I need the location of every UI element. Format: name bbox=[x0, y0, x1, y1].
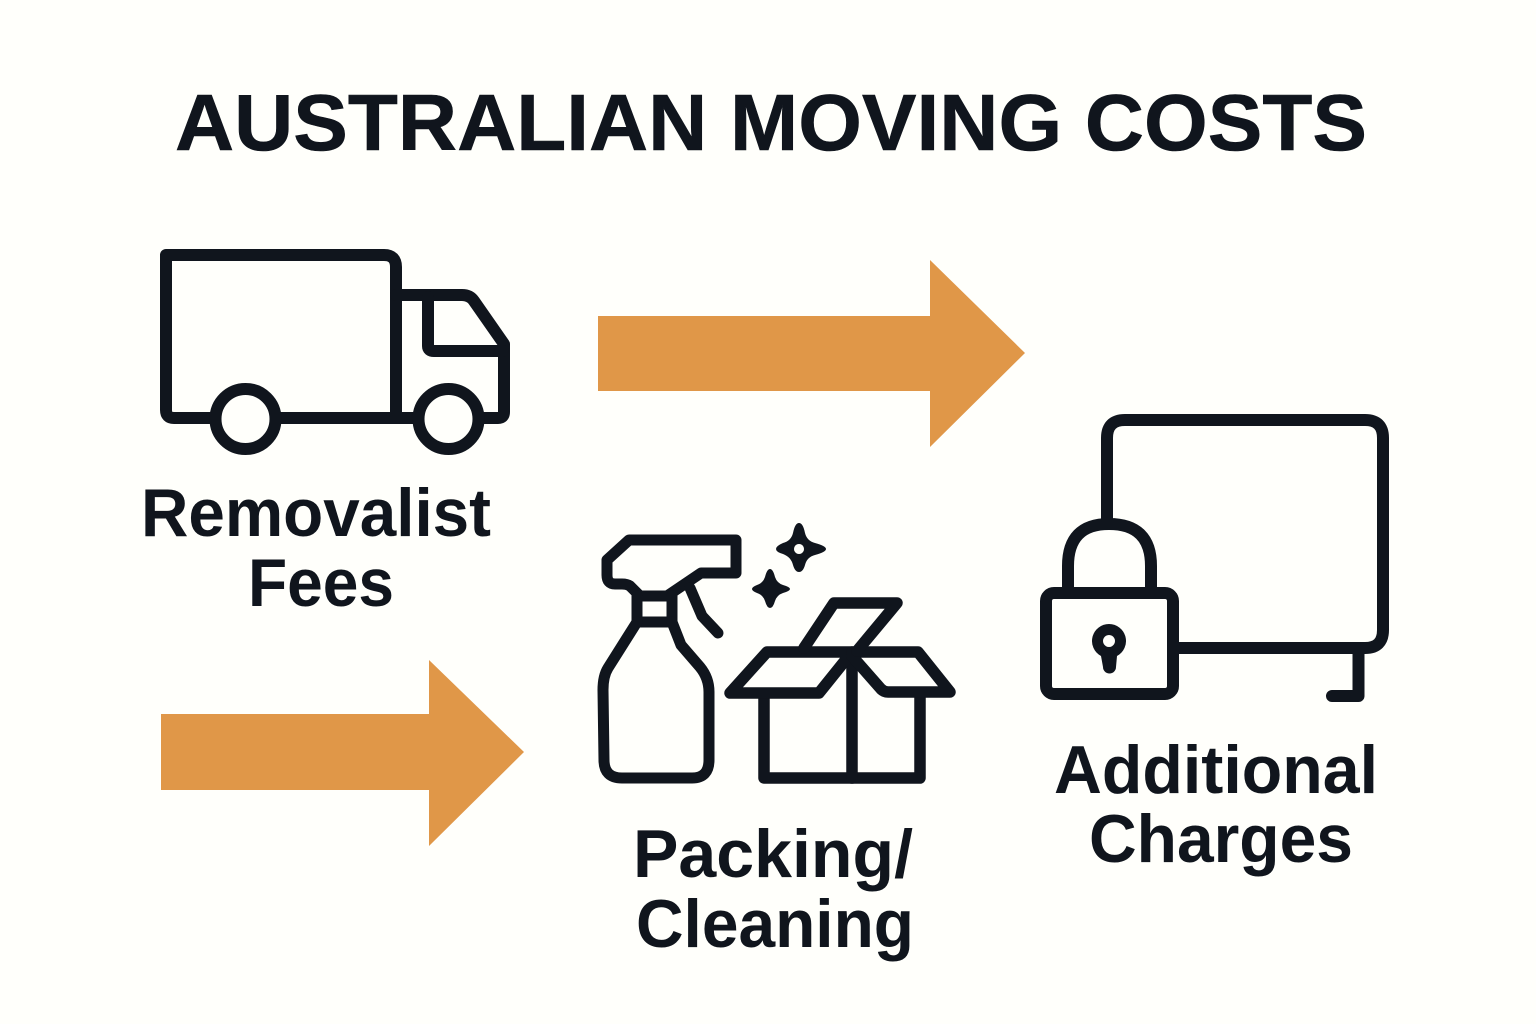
title: AUSTRALIAN MOVING COSTS bbox=[175, 78, 1367, 167]
label: packing and cleaning bbox=[633, 816, 914, 962]
icon: spray bottle bbox=[603, 540, 736, 778]
arrow: bottom bbox=[161, 660, 524, 846]
label: packing and cleaning: Packing/ bbox=[633, 816, 913, 892]
label: packing and cleaning: Cleaning bbox=[636, 886, 914, 962]
icon: sparkles bbox=[752, 523, 826, 608]
label: additional charges: Additional bbox=[1054, 732, 1378, 808]
label: additional charges bbox=[1054, 732, 1378, 877]
label: removalist fees bbox=[141, 475, 491, 621]
icon: removalist truck bbox=[166, 255, 504, 449]
label: additional charges: Charges bbox=[1089, 801, 1353, 877]
arrow: top bbox=[598, 260, 1025, 447]
label: removalist fees: Fees bbox=[248, 545, 394, 621]
icon: screen with padlock bbox=[1046, 420, 1383, 696]
icon: open box bbox=[730, 603, 950, 778]
label: removalist fees: Removalist bbox=[141, 475, 491, 551]
